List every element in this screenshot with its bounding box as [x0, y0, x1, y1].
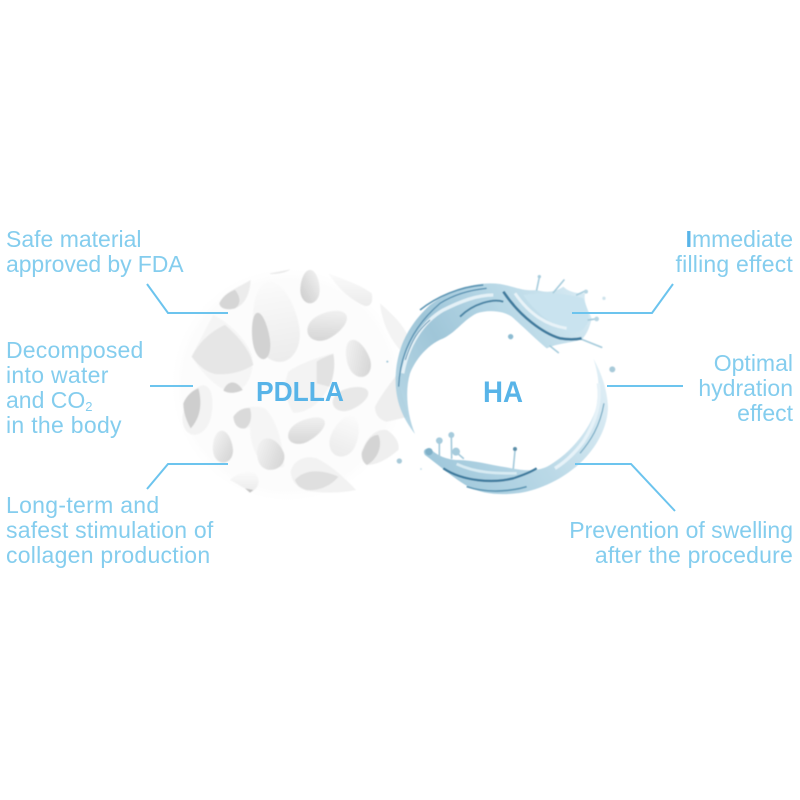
text: optimal: effect	[737, 400, 794, 426]
text: long-term: Long-term and	[6, 492, 160, 518]
arrow: safe material leader	[147, 284, 228, 313]
heading: PDLLA: PDLLA	[256, 376, 344, 407]
text: prevention: after the procedure	[595, 542, 793, 568]
text: decomposed: Decomposed	[6, 337, 144, 363]
arrow: long-term leader	[147, 464, 228, 489]
icon: HA water ring	[386, 275, 615, 494]
icon: PDLLA porous texture	[178, 269, 408, 493]
arrow: immediate leader	[572, 284, 673, 313]
arrow: optimal leader	[607, 385, 683, 387]
lower water swirl	[397, 358, 608, 494]
text: optimal: hydration	[698, 375, 793, 401]
heading: HA: HA	[483, 376, 523, 409]
arrow: decomposed leader	[150, 385, 193, 387]
upper water swirl	[386, 275, 615, 434]
text: immediate: Immediate	[686, 226, 793, 252]
arrow: prevention leader	[575, 464, 675, 511]
text: long-term: collagen production	[6, 542, 210, 568]
text: optimal: Optimal	[714, 350, 793, 376]
text: decomposed: 2	[85, 399, 92, 414]
text: decomposed: into water	[6, 362, 109, 388]
text: decomposed: and CO	[6, 387, 85, 413]
text: immediate: filling effect	[676, 251, 793, 277]
panel: PDLLA sphere	[172, 269, 408, 501]
text: safe material: approved by FDA	[6, 251, 184, 277]
text: prevention: Prevention of swelling	[569, 517, 793, 543]
text: safe material: Safe material	[6, 226, 142, 252]
text: long-term: safest stimulation of	[6, 517, 214, 543]
text: decomposed: in the body	[6, 412, 122, 438]
